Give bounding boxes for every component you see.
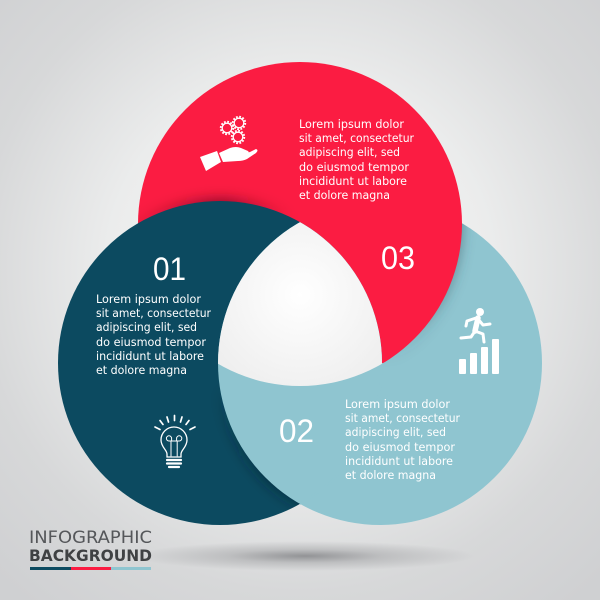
text block: dark circle: Lorem ipsum dolor <box>96 293 201 306</box>
icon: runner on bars <box>459 308 499 374</box>
shadow of light circle on dark circle <box>228 428 300 508</box>
shadow of red circle on light circle <box>410 224 470 344</box>
text block: light circle: Lorem ipsum dolor <box>345 398 450 411</box>
text block: dark circle: et dolore magna <box>96 364 187 377</box>
title: infographic background <box>29 528 152 570</box>
title: infographic background: BACKGROUND <box>29 546 152 565</box>
panel: 03 red circle <box>138 62 462 386</box>
text block: red circle <box>299 118 414 202</box>
number 01: 01 <box>153 251 186 287</box>
shadow of dark circle on red circle <box>138 190 284 223</box>
panel: 02 light blue circle <box>218 201 542 525</box>
centre white rounded triangle <box>218 222 382 386</box>
icon: hand with gears <box>200 117 258 171</box>
number 03: 03 <box>381 240 415 276</box>
text block: dark circle <box>96 293 211 377</box>
text block: red circle: Lorem ipsum dolor <box>299 118 404 131</box>
text block: dark circle: do eiusmod tempor <box>96 336 206 349</box>
text block: red circle: sit amet, consectetur <box>299 132 414 145</box>
text block: light circle <box>345 398 460 482</box>
text block: red circle: do eiusmod tempor <box>299 161 409 174</box>
ground shadow <box>135 541 475 571</box>
text block: light circle: do eiusmod tempor <box>345 441 455 454</box>
text block: light circle: sit amet, consectetur <box>345 412 460 425</box>
text block: dark circle: adipiscing elit, sed <box>96 321 197 334</box>
text block: dark circle: incididunt ut labore <box>96 350 204 363</box>
text block: red circle: et dolore magna <box>299 189 390 202</box>
text block: light circle: adipiscing elit, sed <box>345 426 446 439</box>
text block: red circle: incididunt ut labore <box>299 175 407 188</box>
number 02: 02 <box>279 413 314 449</box>
text block: light circle: et dolore magna <box>345 469 436 482</box>
title: infographic background: INFOGRAPHIC <box>29 528 152 547</box>
text block: dark circle: sit amet, consectetur <box>96 307 211 320</box>
icon: light bulb <box>155 416 195 467</box>
text block: red circle: adipiscing elit, sed <box>299 146 400 159</box>
panel: 01 dark teal circle <box>58 201 382 525</box>
seam cover along dark circle edge inside light circle <box>300 363 382 504</box>
light circle overlap on dark circle <box>218 222 382 504</box>
text block: light circle: incididunt ut labore <box>345 455 453 468</box>
